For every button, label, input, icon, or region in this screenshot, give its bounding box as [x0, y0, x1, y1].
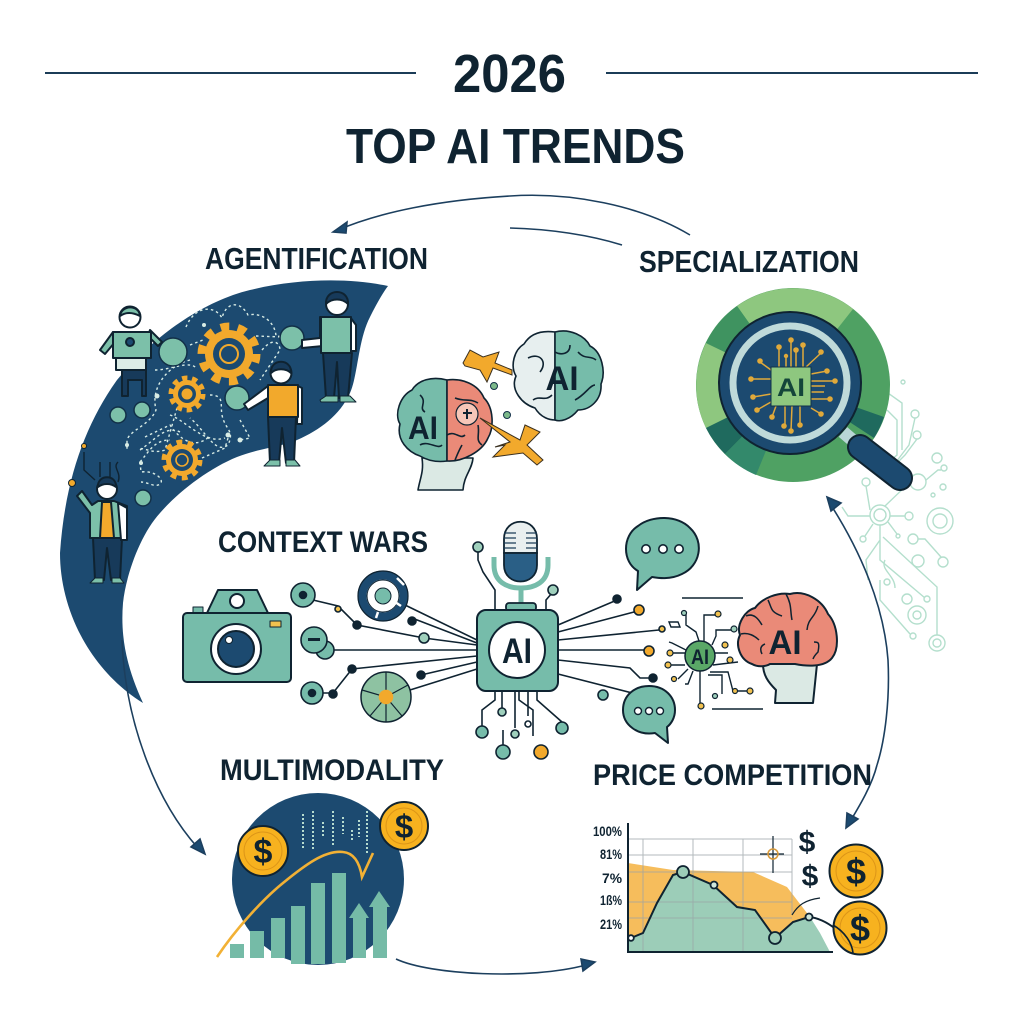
title — [45, 44, 978, 174]
arrow: agentification swoosh to multimodality — [122, 640, 205, 854]
coin left: $ — [254, 833, 273, 871]
explosion lower — [480, 418, 543, 465]
title: TOP AI TRENDS — [346, 120, 685, 174]
gear: medium — [172, 379, 202, 409]
axis labels: 81% — [600, 846, 622, 862]
agent: man in orange vest — [244, 362, 302, 466]
area chart — [628, 823, 853, 953]
small AI chip with circuit — [665, 598, 763, 709]
coin left — [238, 826, 288, 876]
arrow: agentification to specialization arc top — [333, 195, 690, 245]
magnifying glass — [719, 312, 900, 478]
speech bubble large — [626, 518, 699, 590]
explosion upper — [463, 350, 512, 382]
icon: camera — [183, 590, 291, 682]
panel: specialization — [639, 244, 953, 651]
AI chip — [477, 610, 558, 691]
panel: multimodal hub — [183, 518, 837, 759]
panel: context wars — [218, 331, 603, 559]
dashed agent network — [127, 305, 290, 485]
circuit background — [842, 380, 953, 651]
magnifying glass: AI — [777, 374, 805, 402]
axis labels — [593, 823, 623, 932]
debris — [490, 382, 510, 418]
network nodes — [125, 323, 242, 465]
axis labels: 21% — [600, 916, 622, 932]
gear: lower — [165, 443, 199, 477]
green segmented disc — [696, 288, 890, 482]
coin right — [380, 802, 428, 850]
salmon brain with head: AI — [768, 624, 802, 662]
connector lines left — [313, 552, 659, 745]
title: 2026 — [453, 44, 566, 104]
left brain AI label: AI — [408, 410, 438, 446]
small AI chip with circuit: AI — [691, 646, 709, 669]
right brain with white and teal halves — [513, 331, 603, 421]
left head with teal and salmon brain — [398, 378, 492, 490]
agent: man waving — [68, 444, 127, 583]
heading: specialization: SPECIALIZATION — [639, 244, 859, 279]
heading: context wars: CONTEXT WARS — [218, 526, 428, 559]
speech bubble small — [623, 686, 675, 743]
circuit traces in lens — [751, 342, 835, 431]
arrow: multimodality to price competition — [396, 959, 595, 974]
salmon brain with head — [738, 593, 837, 703]
dollar signs: $ — [799, 826, 816, 859]
dollar signs: $ — [802, 860, 819, 893]
panel: price competition — [593, 759, 886, 954]
left data nodes — [291, 583, 429, 704]
coin top — [830, 844, 882, 898]
coin bottom — [833, 902, 886, 954]
bar chart — [230, 873, 390, 964]
navy circle — [232, 793, 404, 965]
axis labels: 100% — [593, 823, 622, 839]
data orbs — [110, 326, 304, 506]
right brain AI label: AI — [546, 360, 578, 398]
chip nodes — [473, 542, 665, 759]
gear: large — [203, 328, 255, 380]
heading: price competition: PRICE COMPETITION — [593, 759, 872, 792]
axis labels: 7% — [602, 870, 623, 886]
dollar signs — [799, 826, 819, 893]
arrow: into price competition — [846, 765, 877, 828]
heading: multimodality: MULTIMODALITY — [220, 754, 444, 787]
segmented green disc — [361, 672, 411, 722]
panel: agentification — [60, 241, 428, 703]
target disc — [358, 571, 408, 621]
blue swoosh background — [60, 280, 388, 703]
AI chip: AI — [502, 632, 532, 671]
agent: man with blue trousers — [302, 292, 356, 402]
agent: robot figure — [100, 306, 162, 396]
panel: multimodality — [217, 754, 444, 965]
coin right: $ — [395, 808, 413, 845]
axis labels: 1ß% — [600, 892, 622, 908]
coin top: $ — [846, 851, 866, 892]
arrow: right arc from price competition to specialization — [827, 497, 888, 765]
data dots — [303, 811, 367, 853]
icon: microphone — [494, 522, 548, 611]
coin bottom: $ — [850, 908, 870, 949]
heading: agentification: AGENTIFICATION — [205, 241, 428, 276]
trend curve — [217, 852, 373, 957]
